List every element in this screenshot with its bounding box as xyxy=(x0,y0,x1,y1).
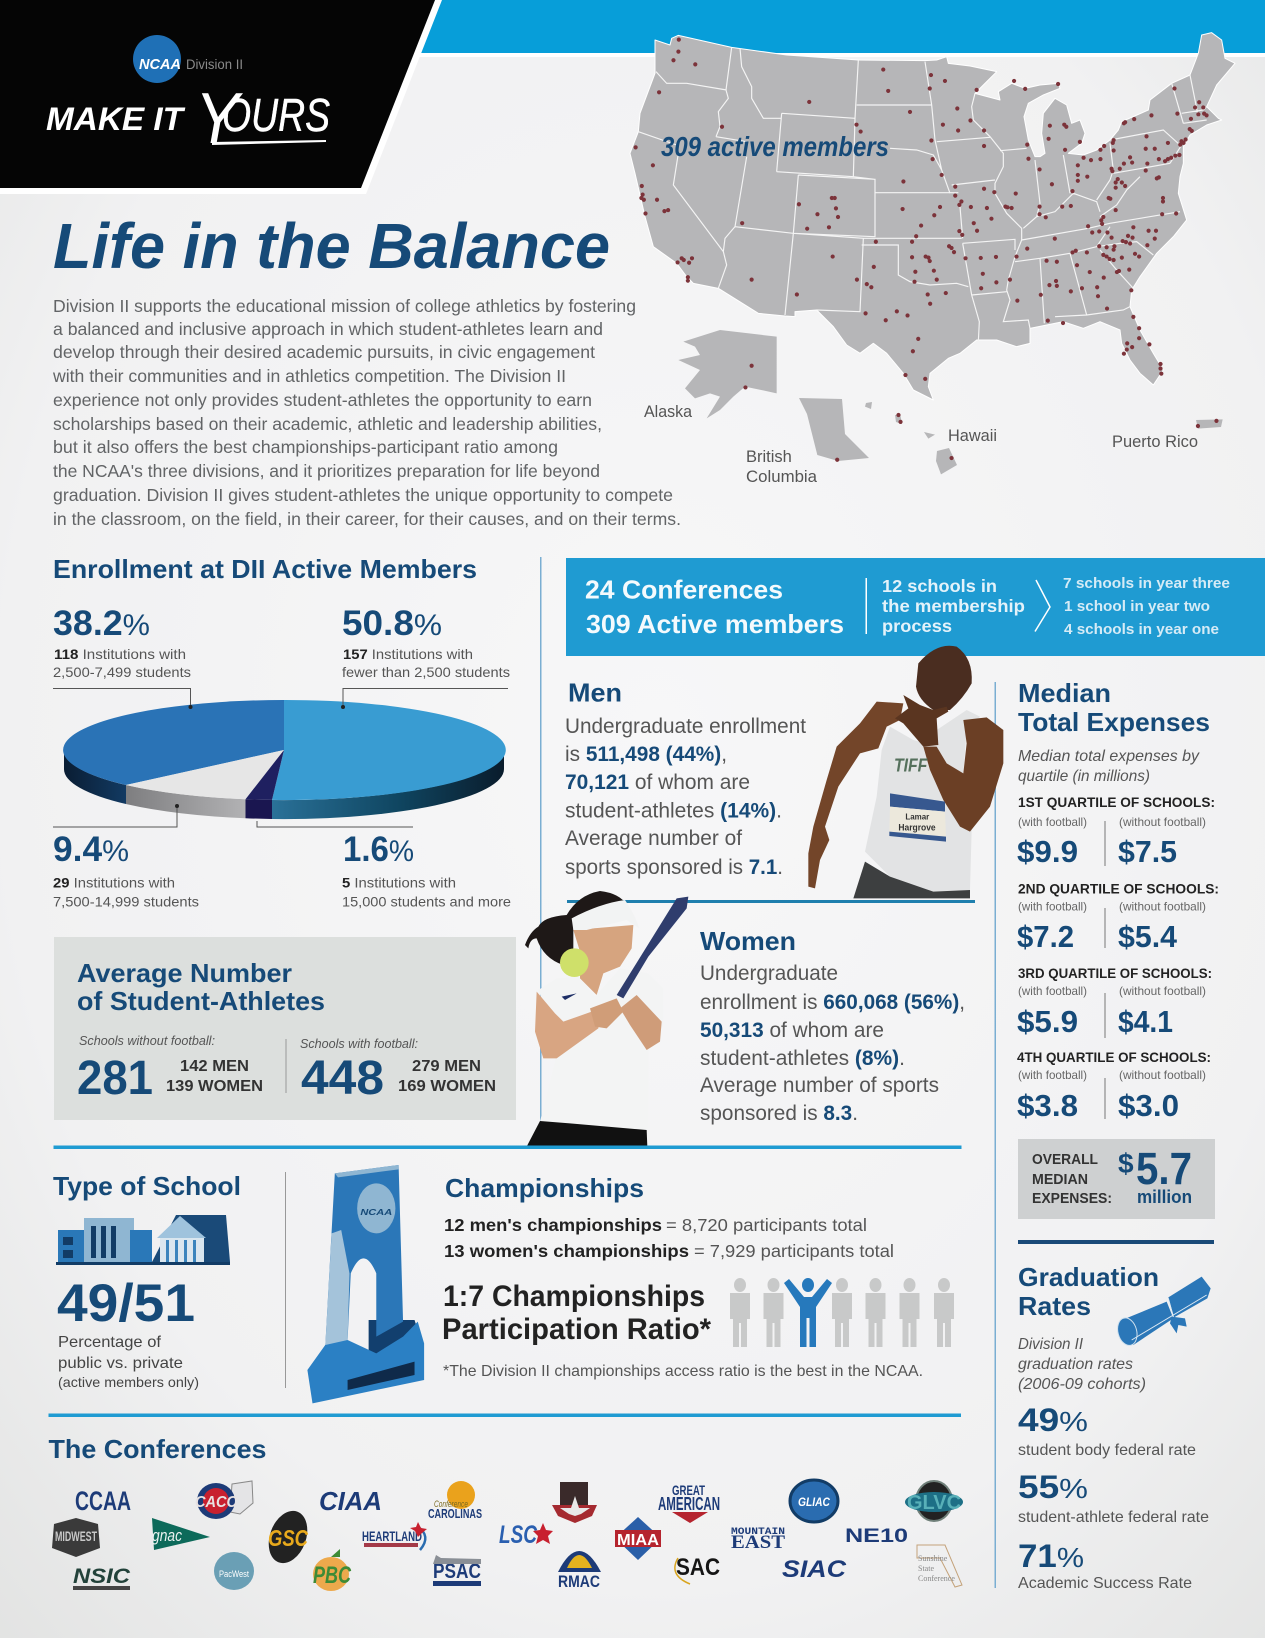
map label: alaska: Alaska xyxy=(644,403,693,421)
panel: median total expenses xyxy=(1017,678,1219,1219)
banner headline: 24 Conferences xyxy=(585,574,783,604)
logo: Sunshine State: State xyxy=(918,1564,934,1573)
logo: conference shield with star xyxy=(552,1482,597,1523)
participation ratio xyxy=(442,1280,711,1346)
participation ratio: 1:7 Championships xyxy=(443,1280,705,1313)
third quartile xyxy=(1017,966,1212,1039)
map: puerto rico xyxy=(1196,419,1223,429)
expenses heading: Total Expenses xyxy=(1018,707,1210,737)
logo: PBC: PBC xyxy=(313,1562,352,1589)
logo: SAC: SAC xyxy=(676,1554,720,1581)
icon: trophy: NCAA xyxy=(360,1207,392,1217)
logo: GSC xyxy=(262,1505,314,1569)
first quartile: (with football) xyxy=(1018,815,1087,829)
overall median expenses xyxy=(1018,1139,1215,1219)
stat: student-athlete rate: student-athlete federal rate xyxy=(1018,1509,1209,1526)
intro paragraph: a balanced and inclusive approach in which student-athletes learn and xyxy=(53,319,603,339)
logo: Sunshine State: Sunshine xyxy=(918,1554,948,1563)
logo: LSC: LSC xyxy=(499,1521,538,1549)
NCAA logo: Division II xyxy=(186,57,243,72)
men text: sports sponsored is 7.1. xyxy=(565,856,783,879)
make it yours logotype: OURS xyxy=(222,89,330,141)
logo: CIAA: CIAA xyxy=(319,1486,382,1516)
logo: CCAA: CCAA xyxy=(75,1486,131,1516)
logo: MIAA: MIAA xyxy=(617,1532,659,1549)
logo: Conference Carolinas: CAROLINAS xyxy=(428,1506,482,1521)
photo: male sprinter xyxy=(808,646,1003,898)
logo: GNAC: gnac xyxy=(152,1526,182,1545)
second quartile xyxy=(1017,882,1219,954)
logo: Great Midwest xyxy=(52,1518,100,1557)
icon: diploma xyxy=(1115,1277,1211,1348)
women text xyxy=(700,962,965,1125)
icon: trophy xyxy=(307,1165,424,1403)
overall median expenses: million xyxy=(1137,1187,1192,1207)
make it yours logotype: Y xyxy=(195,79,244,159)
women text: student-athletes (8%). xyxy=(700,1047,905,1070)
schools by year: 7 schools in year three xyxy=(1063,575,1230,592)
icon: school buildings xyxy=(56,1215,230,1265)
logo: CACC: CACC xyxy=(195,1494,237,1511)
overall median expenses: EXPENSES: xyxy=(1032,1191,1112,1207)
logo: Conference Carolinas: Conference xyxy=(434,1499,468,1509)
women heading: Women xyxy=(700,926,796,956)
schools without football: 139 WOMEN xyxy=(166,1078,263,1095)
logo: PBC xyxy=(313,1549,352,1591)
men heading: Men xyxy=(568,678,622,708)
stat: 9.4 percent: 9.4% xyxy=(53,830,129,869)
schools by year: 4 schools in year one xyxy=(1064,621,1219,638)
logo: SIAC: SIAC xyxy=(782,1556,847,1583)
intro paragraph: the NCAA's three divisions, and it prioritizes preparation for life beyond xyxy=(53,461,600,481)
logo: Sunshine State: Conference xyxy=(918,1574,955,1583)
second quartile: $5.4 xyxy=(1118,919,1178,954)
logo: GLVC xyxy=(905,1481,963,1521)
logo: GLIAC: GLIAC xyxy=(798,1495,830,1509)
first quartile: $9.9 xyxy=(1017,834,1078,869)
men text: student-athletes (14%). xyxy=(565,800,782,822)
map: british columbia xyxy=(799,398,869,461)
first quartile: 1ST QUARTILE OF SCHOOLS: xyxy=(1018,795,1215,810)
conferences heading: The Conferences xyxy=(48,1434,266,1464)
map: member school dots xyxy=(636,40,1216,460)
logo: RMAC: RMAC xyxy=(558,1572,600,1591)
fourth quartile: $3.0 xyxy=(1118,1088,1179,1123)
women's championships: 13 women's championships xyxy=(444,1241,689,1261)
intro paragraph: experience not only provides student-athletes the opportunity to earn xyxy=(53,390,592,410)
blue top banner xyxy=(417,0,1265,57)
logo: Great Midwest: MIDWEST xyxy=(55,1528,97,1544)
men's championships: 12 men's championships xyxy=(444,1215,662,1235)
schools by year: 1 school in year two xyxy=(1064,598,1210,615)
second quartile: $7.2 xyxy=(1017,919,1074,954)
third quartile: $4.1 xyxy=(1118,1004,1173,1039)
map label: puerto rico: Puerto Rico xyxy=(1112,433,1198,451)
icon: chevron arrow xyxy=(1035,580,1050,632)
logo: GLVC: GLVC xyxy=(907,1492,961,1514)
logo: GSC: GSC xyxy=(268,1525,308,1551)
type of school caption: public vs. private xyxy=(58,1355,183,1372)
second quartile: (with football) xyxy=(1018,900,1087,914)
women text: Undergraduate xyxy=(700,962,838,985)
type of school caption: (active members only) xyxy=(58,1374,199,1390)
stat: academic success rate: Academic Success Rate xyxy=(1018,1575,1192,1592)
stat: student-athlete rate xyxy=(1018,1469,1209,1526)
map: hawaii xyxy=(865,402,957,474)
panel: the conferences xyxy=(48,1434,963,1591)
schools without football: 281 xyxy=(77,1052,153,1105)
women's championships xyxy=(444,1241,894,1261)
logo: MIAA xyxy=(615,1517,661,1560)
stat: 1.6 percent xyxy=(342,830,511,910)
expenses intro: quartile (in millions) xyxy=(1018,768,1150,785)
expenses heading xyxy=(1018,678,1210,737)
second quartile: (without football) xyxy=(1119,900,1206,914)
ratio figures xyxy=(730,1278,954,1347)
logo: Conference Carolinas xyxy=(428,1481,482,1521)
pie chart xyxy=(63,700,506,819)
panel heading xyxy=(77,958,325,1016)
fourth quartile: (with football) xyxy=(1018,1068,1087,1082)
banner headline: 309 Active members xyxy=(586,609,844,639)
men text: Undergraduate enrollment xyxy=(565,715,806,738)
stat: 9.4 percent xyxy=(53,830,199,910)
map label: british columbia: British xyxy=(746,448,792,466)
panel: enrollment xyxy=(53,554,511,910)
stat: 50.8 percent xyxy=(342,604,510,680)
leader lines xyxy=(53,688,508,827)
graduation intro xyxy=(1018,1336,1146,1393)
women text: sponsored is 8.3. xyxy=(700,1102,858,1125)
map label: british columbia xyxy=(746,448,818,486)
panel: men xyxy=(565,646,1003,898)
intro paragraph: develop through their desired academic pursuits, in civic engagement xyxy=(53,342,595,362)
panel: championships xyxy=(442,1173,954,1380)
men text: is 511,498 (44%), xyxy=(565,743,727,766)
first quartile: (without football) xyxy=(1119,815,1206,829)
championships heading: Championships xyxy=(445,1173,644,1203)
overall median expenses: OVERALL xyxy=(1032,1152,1098,1168)
schools with football: 169 WOMEN xyxy=(398,1078,496,1095)
map: alaska xyxy=(678,330,777,418)
map label: hawaii: Hawaii xyxy=(948,427,997,445)
logo: PacWest xyxy=(214,1552,254,1590)
participation ratio: Participation Ratio* xyxy=(442,1313,711,1346)
ratio footnote: *The Division II championships access ratio is the best in the NCAA. xyxy=(443,1363,923,1380)
graduation heading: Rates xyxy=(1018,1291,1091,1321)
type of school caption xyxy=(58,1334,199,1390)
photo: female tennis player xyxy=(525,891,688,1147)
fourth quartile xyxy=(1017,1050,1211,1123)
panel heading: Average Number xyxy=(77,958,292,988)
overall median expenses: $ xyxy=(1118,1148,1134,1179)
logo: Great American: GREAT xyxy=(672,1482,705,1498)
men's championships xyxy=(444,1215,867,1235)
logo: PSAC: PSAC xyxy=(433,1560,481,1583)
type of school caption: Percentage of xyxy=(58,1334,162,1351)
stat: 1.6 percent: 5 Institutions with xyxy=(342,874,456,890)
overall median expenses: MEDIAN xyxy=(1032,1172,1088,1188)
logo: Great American: AMERICAN xyxy=(658,1494,720,1514)
panel heading: of Student-Athletes xyxy=(77,986,325,1016)
graduation intro: Division II xyxy=(1018,1336,1084,1353)
third quartile: 3RD QUARTILE OF SCHOOLS: xyxy=(1018,966,1212,981)
intro paragraph xyxy=(52,296,681,529)
photo: male sprinter: Hargrove xyxy=(898,823,936,833)
title: Life in the Balance xyxy=(53,210,610,282)
schools with football: 279 MEN xyxy=(412,1058,481,1075)
stat: 38.2 percent: 118 Institutions with xyxy=(54,646,186,662)
women text: 50,313 of whom are xyxy=(700,1019,884,1042)
stat: 38.2 percent: 2,500-7,499 students xyxy=(53,664,191,680)
stat: 50.8 percent: 50.8% xyxy=(342,604,442,643)
map caption: active members: 309 active members xyxy=(661,131,889,162)
enrollment heading: Enrollment at DII Active Members xyxy=(53,554,477,584)
logo: RMAC xyxy=(558,1551,601,1591)
graduation intro: graduation rates xyxy=(1018,1356,1133,1373)
graduation heading xyxy=(1018,1262,1159,1321)
make it yours logotype: MAKE IT xyxy=(46,101,186,137)
logo: PacWest: PacWest xyxy=(219,1569,249,1579)
logo: PSAC xyxy=(433,1555,481,1586)
stat: 1.6 percent: 1.6% xyxy=(343,830,414,869)
schools with football: 448 xyxy=(301,1052,384,1105)
intro paragraph: in the classroom, on the field, in their career, for their causes, and on their terms. xyxy=(53,509,681,529)
men's championships: = 8,720 participants total xyxy=(666,1215,867,1235)
map: state borders xyxy=(638,47,1207,342)
map of active members xyxy=(630,33,1235,486)
second quartile: 2ND QUARTILE OF SCHOOLS: xyxy=(1018,882,1219,896)
intro paragraph: scholarships based on their academic, athletic and leadership abilities, xyxy=(53,414,602,434)
schools without football: Schools without football: xyxy=(79,1034,215,1048)
schools with football xyxy=(300,1037,496,1105)
intro paragraph: but it also offers the best championships-participant ratio among xyxy=(53,437,558,457)
black logo banner xyxy=(0,0,442,194)
third quartile: $5.9 xyxy=(1017,1004,1078,1039)
make it yours logotype xyxy=(46,79,330,159)
third quartile: (without football) xyxy=(1119,984,1206,998)
expenses intro: Median total expenses by xyxy=(1018,748,1200,765)
photo: male sprinter: TIFF xyxy=(894,755,928,776)
stat: student body rate: student body federal rate xyxy=(1018,1442,1196,1459)
logo: Mountain East: MOUNTAIN xyxy=(731,1527,785,1538)
logo: GLIAC xyxy=(790,1480,838,1522)
fourth quartile: (without football) xyxy=(1119,1068,1206,1082)
intro paragraph: Division II supports the educational mission of college athletics by fostering xyxy=(53,296,636,316)
graduation intro: (2006-09 cohorts) xyxy=(1018,1376,1146,1393)
stat: student body rate xyxy=(1018,1402,1196,1459)
logo: Heartland xyxy=(362,1522,427,1550)
stat: academic success rate xyxy=(1018,1538,1192,1592)
women's championships: = 7,929 participants total xyxy=(694,1241,894,1261)
first quartile xyxy=(1017,795,1215,869)
NCAA logo: NCAA xyxy=(139,56,181,73)
stat: 50.8 percent: 157 Institutions with xyxy=(343,646,473,662)
stat: academic success rate: 71% xyxy=(1018,1538,1084,1574)
stat: student body rate: 49% xyxy=(1018,1402,1088,1438)
stat: 9.4 percent: 29 Institutions with xyxy=(53,874,175,890)
membership process: process xyxy=(882,616,952,636)
schools with football: Schools with football: xyxy=(300,1037,418,1051)
logo: CACC xyxy=(195,1481,253,1519)
stat: student-athlete rate: 55% xyxy=(1018,1469,1088,1505)
panel: women xyxy=(525,891,965,1147)
fourth quartile: 4TH QUARTILE OF SCHOOLS: xyxy=(1017,1050,1211,1065)
overall median expenses: 5.7 xyxy=(1136,1143,1192,1194)
schools by year xyxy=(1063,575,1230,638)
stat: 50.8 percent: fewer than 2,500 students xyxy=(342,664,510,680)
first quartile: $7.5 xyxy=(1118,834,1177,869)
stat: public vs private: 49/51 xyxy=(57,1274,195,1333)
type of school heading: Type of School xyxy=(53,1171,241,1201)
graduation heading: Graduation xyxy=(1018,1262,1159,1292)
logo: GNAC xyxy=(152,1518,210,1550)
logo: Mountain East: EAST xyxy=(731,1532,785,1553)
expenses intro xyxy=(1018,748,1200,785)
map label: british columbia: Columbia xyxy=(746,468,818,486)
fourth quartile: $3.8 xyxy=(1017,1088,1078,1123)
intro paragraph: graduation. Division II gives student-athletes the unique opportunity to compete xyxy=(53,485,673,505)
men text: 70,121 of whom are xyxy=(565,771,750,794)
women text: enrollment is 660,068 (56%), xyxy=(700,991,965,1014)
membership process xyxy=(882,576,1025,636)
NCAA logo xyxy=(133,35,243,83)
women text: Average number of sports xyxy=(700,1074,939,1097)
stat: 1.6 percent: 15,000 students and more xyxy=(342,894,511,910)
membership process: the membership xyxy=(882,596,1025,616)
logo: NE10: NE10 xyxy=(845,1526,908,1547)
photo: male sprinter: Lamar xyxy=(905,812,929,821)
stat: 9.4 percent: 7,500-14,999 students xyxy=(53,894,199,910)
intro paragraph: with their communities and in athletics competition. The Division II xyxy=(52,366,566,386)
panel: conferences and members banner xyxy=(566,558,1265,656)
panel: graduation rates xyxy=(1018,1262,1211,1592)
membership process: 12 schools in xyxy=(882,576,997,596)
stat: 38.2 percent xyxy=(53,604,191,680)
panel: type of school xyxy=(53,1171,241,1390)
logo: Great American xyxy=(658,1482,720,1523)
map: contiguous states xyxy=(630,33,1235,400)
expenses heading: Median xyxy=(1018,678,1111,708)
logo: Sunshine State xyxy=(917,1545,962,1587)
panel: average number of student-athletes xyxy=(54,937,516,1120)
stat: 38.2 percent: 38.2% xyxy=(53,604,150,643)
men text: Average number of xyxy=(565,827,742,850)
schools without football: 142 MEN xyxy=(180,1058,249,1075)
third quartile: (with football) xyxy=(1018,984,1087,998)
banner headline xyxy=(585,574,844,639)
logo: NSIC: NSIC xyxy=(73,1565,131,1588)
schools without football xyxy=(77,1034,263,1105)
logo: Heartland: HEARTLAND xyxy=(362,1528,422,1544)
men text xyxy=(565,715,806,879)
